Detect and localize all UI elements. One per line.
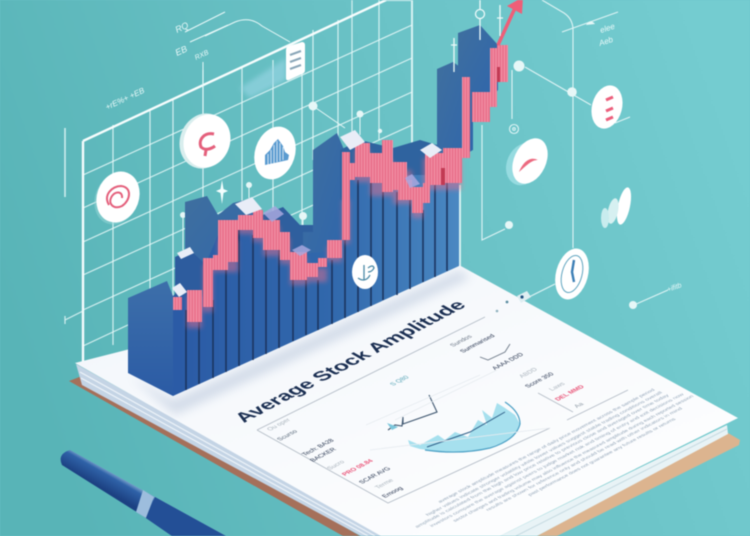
trend arrow [498, 0, 523, 45]
shadow under bars [130, 270, 470, 415]
body text block: investors compare the average against peers to judge market risk and timing of entry and exit decisions now [429, 392, 687, 528]
bar chart: 3D stepped columns [128, 25, 508, 396]
scribble notes: top left: +rE%+ +EB [104, 86, 147, 112]
back block: middle [263, 207, 316, 270]
title: Average Stock Amplitude [230, 298, 471, 425]
panel labels: right list: Aa [573, 402, 586, 409]
panel labels: right list: Sundos [449, 334, 475, 348]
page marker dots [496, 291, 531, 312]
scribble notes: right: Aeb [597, 35, 615, 48]
connector nodes [505, 21, 637, 309]
scribble notes: right: elee [599, 21, 617, 35]
scribble notes: top left: RXB [194, 49, 210, 62]
pink ribbon [173, 45, 508, 322]
connector network: right [482, 0, 668, 305]
lead block [128, 281, 173, 396]
scribble notes: top left: RQ [174, 20, 190, 35]
scribble notes: top left [104, 12, 290, 140]
panel labels: right list: Laws [548, 381, 568, 392]
icon: blue chart badge [248, 121, 302, 185]
low block [175, 250, 203, 296]
grid panel [65, 0, 460, 362]
back block: right hump [340, 140, 437, 200]
body text block: average stock amplitude measures the range of daily price movement across the sample period [437, 388, 657, 504]
panel labels: left list: PRO 08.84 [341, 458, 375, 477]
body text block: sector changes and trading volume may also influence the measured amplitude during each reported session [452, 394, 696, 523]
peak tiles [172, 130, 442, 297]
panel labels: left list [266, 417, 405, 499]
chart connector dots [180, 102, 382, 250]
body text block: higher values indicate stronger volatility while lower values suggest stable trading conditions overall [425, 391, 664, 517]
scribble notes: top left: EB [174, 44, 189, 58]
panel labels: left list: Emoog [381, 486, 405, 499]
scribble notes: right [597, 21, 683, 294]
panel labels: right list: AAAA DDD [491, 352, 526, 371]
icon: document card [240, 42, 305, 98]
panel labels: left list: Sucro [326, 459, 347, 471]
book: top page [75, 265, 738, 536]
panel labels: right list: S Q80 [389, 375, 411, 387]
icon: pink swoosh badge [499, 132, 555, 191]
top connector ring and sparkles [451, 0, 503, 72]
icon: pink bars badge [587, 82, 627, 132]
pen [61, 450, 226, 536]
purple tiles [263, 174, 420, 256]
body text block [414, 388, 696, 529]
icon: sprout badge [352, 255, 378, 289]
panel labels: right list: Score 350 [524, 372, 556, 389]
book: page block side [76, 364, 728, 536]
icon: pink letter badge [172, 106, 238, 176]
area chart [366, 370, 550, 452]
icon: gauge badge [550, 245, 594, 303]
scribble notes: right: +ifitb [666, 282, 683, 294]
panel labels: right list: DEL MMD [554, 384, 587, 402]
body text block: results are shown for reference only and should be read with other indicators in mind [485, 407, 685, 512]
dark notch in ribbon [441, 67, 500, 185]
panel labels: right list: Summarised [459, 333, 497, 354]
panel labels: left list: Ou oper [266, 417, 293, 432]
panel labels: left list: Scurso [276, 429, 300, 442]
ribbon glow [187, 150, 462, 328]
icon: pink swirl badge [87, 165, 147, 231]
panel labels: right list: ABDD [518, 367, 540, 379]
column dividers [186, 177, 447, 390]
panel labels: left list: SCAR AVG [358, 466, 393, 485]
body text block: past performance does not guarantee any future results or returns [527, 417, 678, 497]
block five [458, 25, 498, 100]
icon: white leaf badges [601, 186, 634, 228]
book: wood cover [69, 376, 360, 536]
panel labels: left list: BACKER [309, 447, 339, 463]
block four [437, 62, 473, 170]
data panel outline [257, 317, 628, 503]
body text block: amplitude is calculated from the high and low price relative to previous close and averaged over time today [414, 393, 672, 529]
back block: left hump [185, 196, 262, 290]
block three [303, 133, 345, 262]
panel labels: left list: Terme [374, 478, 396, 490]
panel labels: right list [389, 333, 587, 409]
column wall [173, 175, 459, 396]
panel labels: left list: Tech: BA28 [301, 438, 336, 457]
